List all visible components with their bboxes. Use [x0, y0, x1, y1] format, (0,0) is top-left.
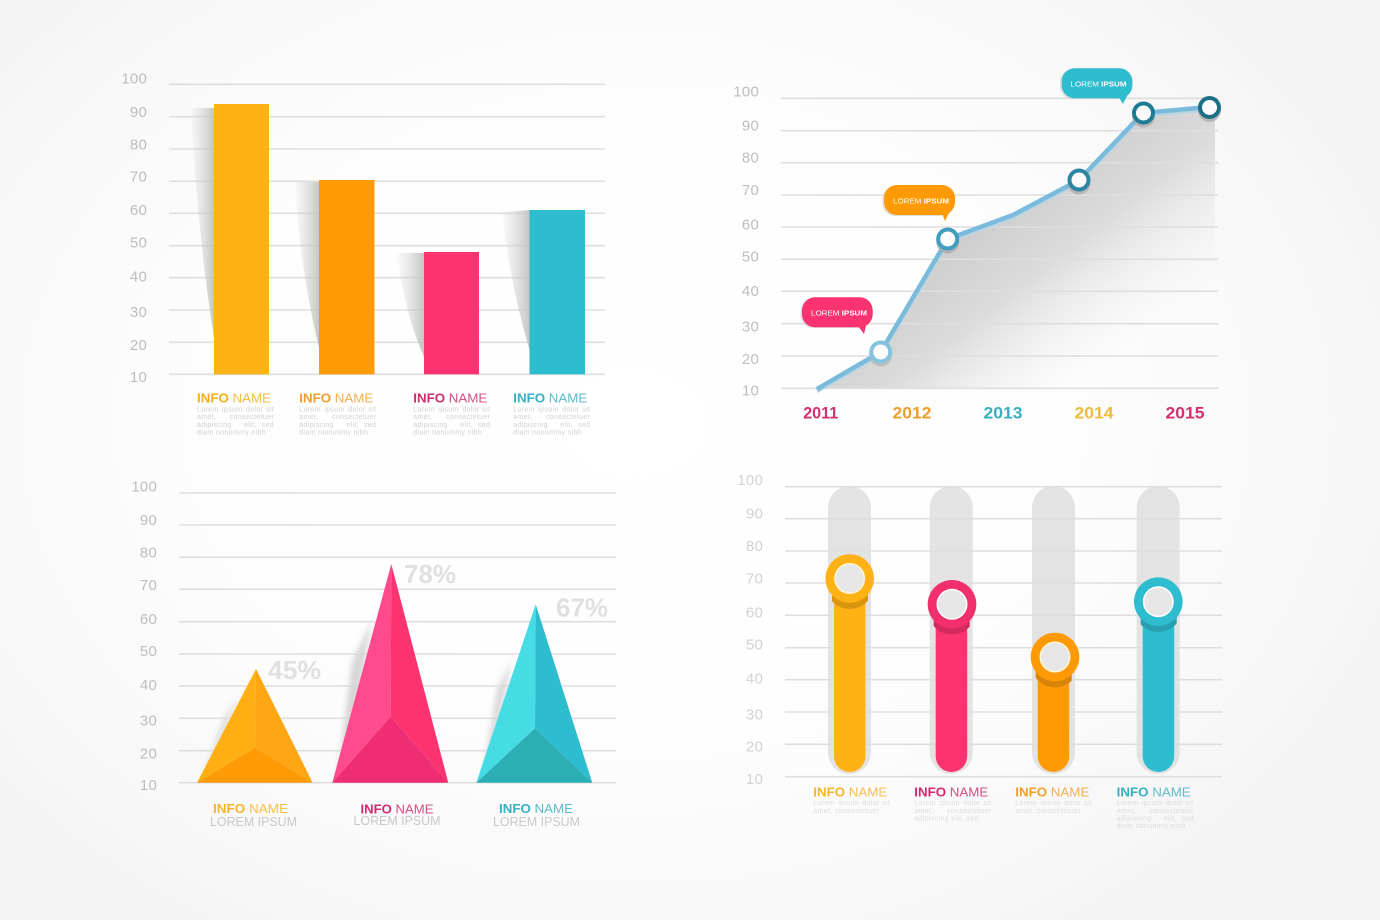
label: bar 2: Lorem — [299, 406, 321, 414]
axis labels: slider chart — [737, 472, 763, 788]
axis labels: bar chart: 30 — [130, 304, 147, 321]
label: triangle 2 — [354, 802, 440, 828]
triangle: 67% — [476, 604, 592, 783]
slider: pink — [928, 486, 976, 774]
axis labels: line chart: 40 — [742, 283, 759, 300]
label: bar 3: amet, — [413, 414, 433, 421]
label: slider 1 — [813, 785, 890, 815]
triangle: 45% — [197, 669, 313, 783]
label: bar 4: sed — [578, 422, 590, 429]
label: triangle 2: INFO NAME — [360, 802, 434, 816]
data point: 2013 — [1068, 168, 1090, 194]
callout: orange: LOREM IPSUM — [893, 196, 949, 205]
year labels: 2014 — [1074, 404, 1114, 422]
axis labels: triangle chart: 40 — [140, 677, 157, 694]
label: slider 2 — [914, 785, 992, 822]
label: triangle 3: INFO NAME — [499, 801, 573, 816]
data point: 2012 — [936, 228, 959, 254]
label: bar 1: consectetuer — [230, 414, 274, 421]
axis labels: bar chart: 60 — [130, 202, 147, 219]
axis labels: triangle chart: 60 — [140, 611, 157, 628]
axis labels: line chart: 20 — [742, 351, 759, 368]
label: slider 4: sed — [1181, 816, 1194, 822]
bar: teal — [502, 210, 585, 374]
label: triangle 1: INFO NAME — [213, 801, 288, 816]
label: bar 1: sed — [262, 422, 274, 429]
label: triangle 1: LOREM IPSUM — [210, 815, 297, 829]
callout: orange — [882, 185, 955, 221]
triangle: 78% — [332, 564, 448, 783]
label: slider 3: Lorem — [1015, 800, 1037, 807]
label: slider 1: ipsum — [838, 800, 859, 807]
axis labels: line chart: 80 — [742, 150, 759, 167]
axis labels: line chart: 30 — [742, 319, 759, 336]
label: slider 2: consectetuer — [947, 808, 992, 815]
label: bar 4: elit, — [560, 422, 573, 429]
axis labels: bar chart: 70 — [130, 168, 147, 186]
callout: pink — [800, 297, 873, 334]
axis labels: line chart: 60 — [742, 216, 759, 233]
axis labels: triangle chart: 80 — [140, 545, 157, 562]
label: bar 2: ipsum — [324, 406, 345, 414]
label: slider 1: amet, consectetuer — [813, 808, 879, 815]
axis labels: bar chart: 50 — [130, 234, 147, 252]
label: bar 2: adipiscing — [299, 422, 334, 429]
axis labels: slider chart: 30 — [746, 706, 763, 723]
label: slider 2: dolor — [963, 800, 981, 807]
panel: triangle chart — [131, 479, 616, 829]
label: slider 4: amet, — [1117, 808, 1136, 815]
label: triangle 2: LOREM IPSUM — [354, 814, 440, 828]
year labels: 2015 — [1166, 404, 1204, 422]
data point: 2011 — [869, 340, 892, 366]
label: bar 4: consectetuer — [546, 414, 591, 421]
label: bar 3: Lorem — [413, 406, 435, 414]
label: slider 2: sit — [983, 800, 991, 807]
label: slider 1: Lorem — [813, 800, 835, 807]
axis labels: triangle chart: 30 — [140, 713, 157, 730]
label: slider 3: amet, consectetuer — [1015, 808, 1081, 815]
label: slider 4: adipiscing — [1117, 816, 1151, 822]
axis labels: bar chart: 90 — [130, 104, 147, 121]
label: bar 2: amet, — [299, 414, 319, 421]
label: bar 3: adipiscing — [413, 422, 448, 429]
label: triangle 3: LOREM IPSUM — [493, 815, 580, 829]
callout: teal: LOREM IPSUM — [1070, 80, 1126, 88]
label: bar 4: dolor — [562, 406, 580, 414]
callout: pink: LOREM IPSUM — [811, 308, 867, 318]
value: 67%: 67% — [556, 593, 608, 623]
label: triangle 3 — [493, 801, 580, 829]
year labels — [803, 404, 1204, 422]
axis labels: line chart: 100 — [733, 84, 759, 101]
label: slider 2: ipsum — [939, 800, 960, 807]
panel: line chart — [733, 68, 1221, 423]
label: slider 3: ipsum — [1040, 800, 1061, 807]
slider: orange — [1031, 486, 1079, 774]
label: bar 4 — [513, 391, 591, 436]
label: slider 4: sit — [1186, 800, 1194, 807]
year labels: 2011 — [803, 404, 838, 422]
label: bar 4: diam nonummy nibh — [513, 430, 582, 436]
axis labels: line chart: 50 — [742, 249, 759, 266]
axis labels: line chart — [733, 84, 759, 400]
panel: slider chart — [737, 472, 1222, 830]
label: slider 4: elit, — [1164, 816, 1176, 822]
label: bar 1 — [197, 391, 274, 436]
callout: teal — [1060, 68, 1132, 104]
axis labels: slider chart: 70 — [746, 570, 763, 587]
axis labels: slider chart: 10 — [746, 771, 763, 788]
label: slider 3: dolor — [1064, 800, 1082, 807]
data point: 2014 — [1132, 102, 1155, 128]
label: bar 1: adipiscing — [197, 422, 232, 429]
axis labels: line chart: 70 — [742, 182, 759, 199]
axis labels: bar chart: 40 — [130, 268, 147, 286]
label: slider 1: dolor — [862, 800, 880, 807]
axis labels: slider chart: 90 — [746, 505, 763, 522]
axis labels: triangle chart: 10 — [140, 777, 157, 794]
label: slider 4: Lorem — [1117, 800, 1138, 807]
axis labels: triangle chart: 50 — [140, 643, 157, 660]
label: slider 3 — [1015, 785, 1092, 815]
label: bar 1: Lorem — [197, 406, 219, 414]
label: bar 4: amet, — [513, 414, 533, 421]
axis labels: triangle chart: 100 — [131, 479, 157, 496]
bar: orange — [295, 180, 374, 374]
axis labels: line chart: 90 — [742, 118, 759, 135]
label: bar 1: diam nonummy nibh — [197, 430, 266, 436]
label: bar 2: diam nonummy nibh — [299, 430, 368, 436]
label: bar 3 — [413, 391, 491, 436]
label: bar 3: sed — [478, 422, 490, 429]
label: slider 4: INFO NAME — [1117, 785, 1191, 800]
axis labels: slider chart: 80 — [746, 538, 763, 555]
label: bar 3: diam nonummy nibh — [413, 430, 482, 436]
label: slider 2: Lorem — [914, 800, 936, 807]
label: bar 3: dolor — [462, 406, 480, 414]
label: bar 4: ipsum — [538, 406, 559, 414]
area shadow under line — [825, 110, 1215, 389]
label: bar 2: dolor — [348, 406, 366, 414]
axis labels: bar chart — [121, 70, 147, 386]
bar: yellow — [191, 104, 269, 374]
axis labels: slider chart: 20 — [746, 739, 763, 756]
axis labels: slider chart: 100 — [737, 472, 763, 489]
axis labels: triangle chart: 90 — [140, 512, 157, 529]
axis labels: slider chart: 60 — [746, 604, 763, 621]
axis labels: triangle chart: 20 — [140, 745, 157, 762]
label: bar 4: adipiscing — [513, 422, 548, 429]
label: bar 2 — [299, 391, 377, 436]
axis labels: slider chart: 50 — [746, 636, 763, 653]
label: bar 1: dolor — [246, 406, 264, 414]
label: slider 4: dolor — [1166, 800, 1183, 807]
label: bar 2: consectetuer — [332, 414, 377, 421]
label: slider 4: diam nonummy nibh — [1117, 823, 1186, 830]
data point: 2015 — [1198, 96, 1221, 122]
panel: bar chart — [121, 70, 605, 436]
axis labels: bar chart: 80 — [130, 136, 147, 154]
label: slider 2: amet, — [914, 808, 934, 815]
axis labels: line chart: 10 — [742, 383, 759, 400]
axis labels: triangle chart: 70 — [140, 577, 157, 594]
label: bar 1: elit, — [244, 422, 257, 429]
value: 45%: 45% — [268, 655, 321, 685]
label: bar 4: INFO NAME — [513, 391, 588, 406]
label: bar 1: sit — [266, 406, 274, 414]
label: slider 4: consectetuer — [1149, 808, 1194, 815]
label: bar 1: INFO NAME — [197, 391, 271, 406]
label: bar 3: elit, — [460, 422, 473, 429]
label: slider 4 — [1117, 785, 1194, 830]
label: bar 3: sit — [482, 406, 490, 414]
axis labels: bar chart: 100 — [121, 70, 147, 88]
slider: yellow — [825, 486, 874, 774]
label: slider 2: adipiscing elit, sed — [914, 816, 979, 822]
label: slider 3: INFO NAME — [1015, 785, 1090, 800]
axis labels: bar chart: 10 — [130, 369, 147, 386]
slider: teal — [1134, 486, 1183, 774]
label: bar 1: amet, — [197, 414, 216, 421]
label: slider 2: INFO NAME — [914, 785, 989, 800]
label: triangle 1 — [210, 801, 297, 829]
label: bar 1: ipsum — [222, 406, 242, 414]
label: bar 3: ipsum — [438, 406, 459, 414]
label: bar 2: sed — [364, 422, 376, 429]
label: bar 3: consectetuer — [446, 414, 491, 421]
axis labels: slider chart: 40 — [746, 670, 763, 687]
axis labels: bar chart: 20 — [130, 337, 147, 354]
label: bar 2: elit, — [346, 422, 359, 429]
label: slider 4: ipsum — [1142, 800, 1162, 807]
data line — [817, 107, 1209, 391]
value: 78%: 78% — [404, 559, 456, 589]
year labels: 2012 — [892, 404, 932, 422]
year labels: 2013 — [984, 404, 1022, 422]
axis labels: triangle chart — [131, 479, 157, 794]
label: bar 2: INFO NAME — [299, 391, 374, 406]
label: bar 4: sit — [582, 406, 590, 414]
bar: pink — [397, 252, 479, 374]
label: slider 1: sit — [882, 800, 890, 807]
label: slider 1: INFO NAME — [813, 785, 888, 800]
label: bar 3: INFO NAME — [413, 391, 488, 406]
label: slider 3: sit — [1084, 800, 1092, 807]
label: bar 2: sit — [368, 406, 376, 414]
label: bar 4: Lorem — [513, 406, 535, 414]
